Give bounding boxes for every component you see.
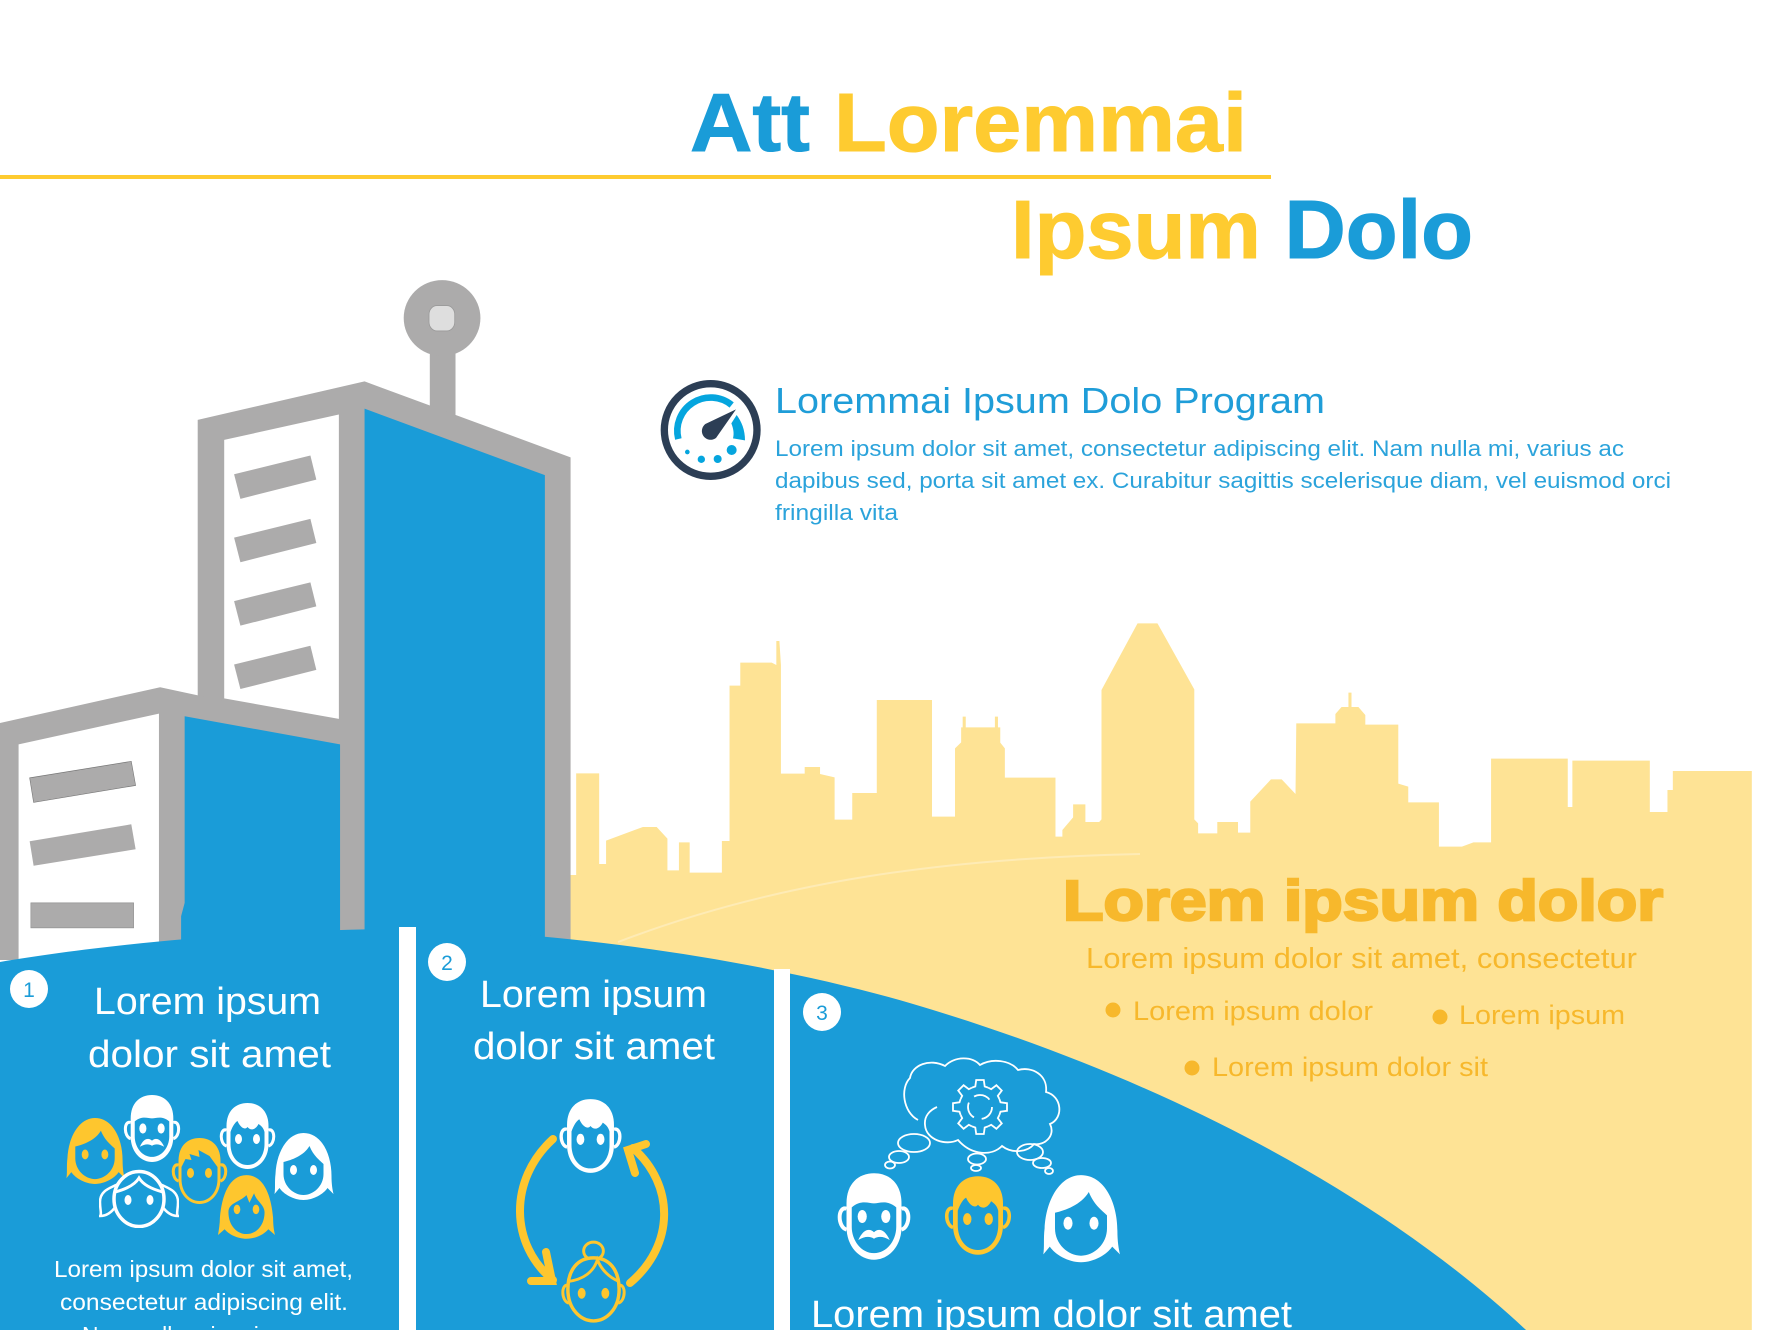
bullet 1: Lorem ipsum dolor: [1133, 996, 1373, 1026]
program description: Lorem ipsum dolor sit amet, consectetur adipiscing elit. Nam nulla mi, varius ac: [775, 436, 1624, 461]
icon: three faces: [840, 1173, 1120, 1262]
panel 1: [10, 970, 353, 1330]
antenna: [404, 280, 480, 416]
step number 1: [10, 970, 48, 1008]
program description: dapibus sed, porta sit amet ex. Curabitur sagittis scelerisque diam, vel euismod orci: [775, 468, 1671, 493]
tall building: [198, 381, 571, 943]
panel 2 heading: Lorem ipsum: [480, 974, 707, 1016]
city skyline silhouette: [570, 623, 1752, 1330]
panel 1 heading: [88, 981, 331, 1076]
callout: subtitle: Lorem ipsum dolor sit amet, consectetur: [1086, 943, 1637, 975]
panel 1 heading: dolor sit amet: [88, 1034, 331, 1076]
panel 1 heading: Lorem ipsum: [94, 981, 321, 1023]
panel 2: [428, 943, 715, 1321]
step number 2: 2: [441, 952, 453, 975]
icon: exchange cycle between two people: [520, 1099, 664, 1321]
panel 1 body text: Lorem ipsum dolor sit amet,: [54, 1256, 353, 1282]
panel 1 body text: [54, 1256, 353, 1330]
blue curved panel background: [0, 929, 1526, 1330]
panel 3: [803, 993, 1292, 1330]
step number 3: 3: [816, 1002, 828, 1025]
program heading: Loremmai Ipsum Dolo Program: [775, 380, 1325, 421]
step number 3: [803, 993, 841, 1031]
title line two: Ipsum Dolo: [1011, 183, 1473, 276]
step number 1: 1: [23, 979, 35, 1002]
panel 1 body text: consectetur adipiscing elit.: [60, 1289, 348, 1315]
program description: [775, 436, 1671, 525]
title line one: Att Loremmai: [690, 76, 1247, 169]
step number 2: [428, 943, 466, 981]
title underline: [0, 175, 1271, 179]
bullet 2: Lorem ipsum: [1459, 1000, 1625, 1030]
panel 2 heading: [473, 974, 715, 1068]
panel dividers: [399, 927, 790, 1330]
low building: [0, 687, 364, 960]
icon: thought cloud with gear: [885, 1058, 1059, 1174]
icon: speedometer gauge: [664, 384, 757, 476]
icon: group of faces: [66, 1095, 334, 1239]
callout: yellow heading: Lorem ipsum dolor: [1063, 869, 1663, 933]
bullet 3: Lorem ipsum dolor sit: [1212, 1052, 1489, 1082]
illustration: office buildings: [0, 280, 571, 960]
program description: fringilla vita: [775, 500, 899, 525]
bullet list: [1106, 996, 1625, 1082]
panel 2 heading: dolor sit amet: [473, 1026, 715, 1068]
